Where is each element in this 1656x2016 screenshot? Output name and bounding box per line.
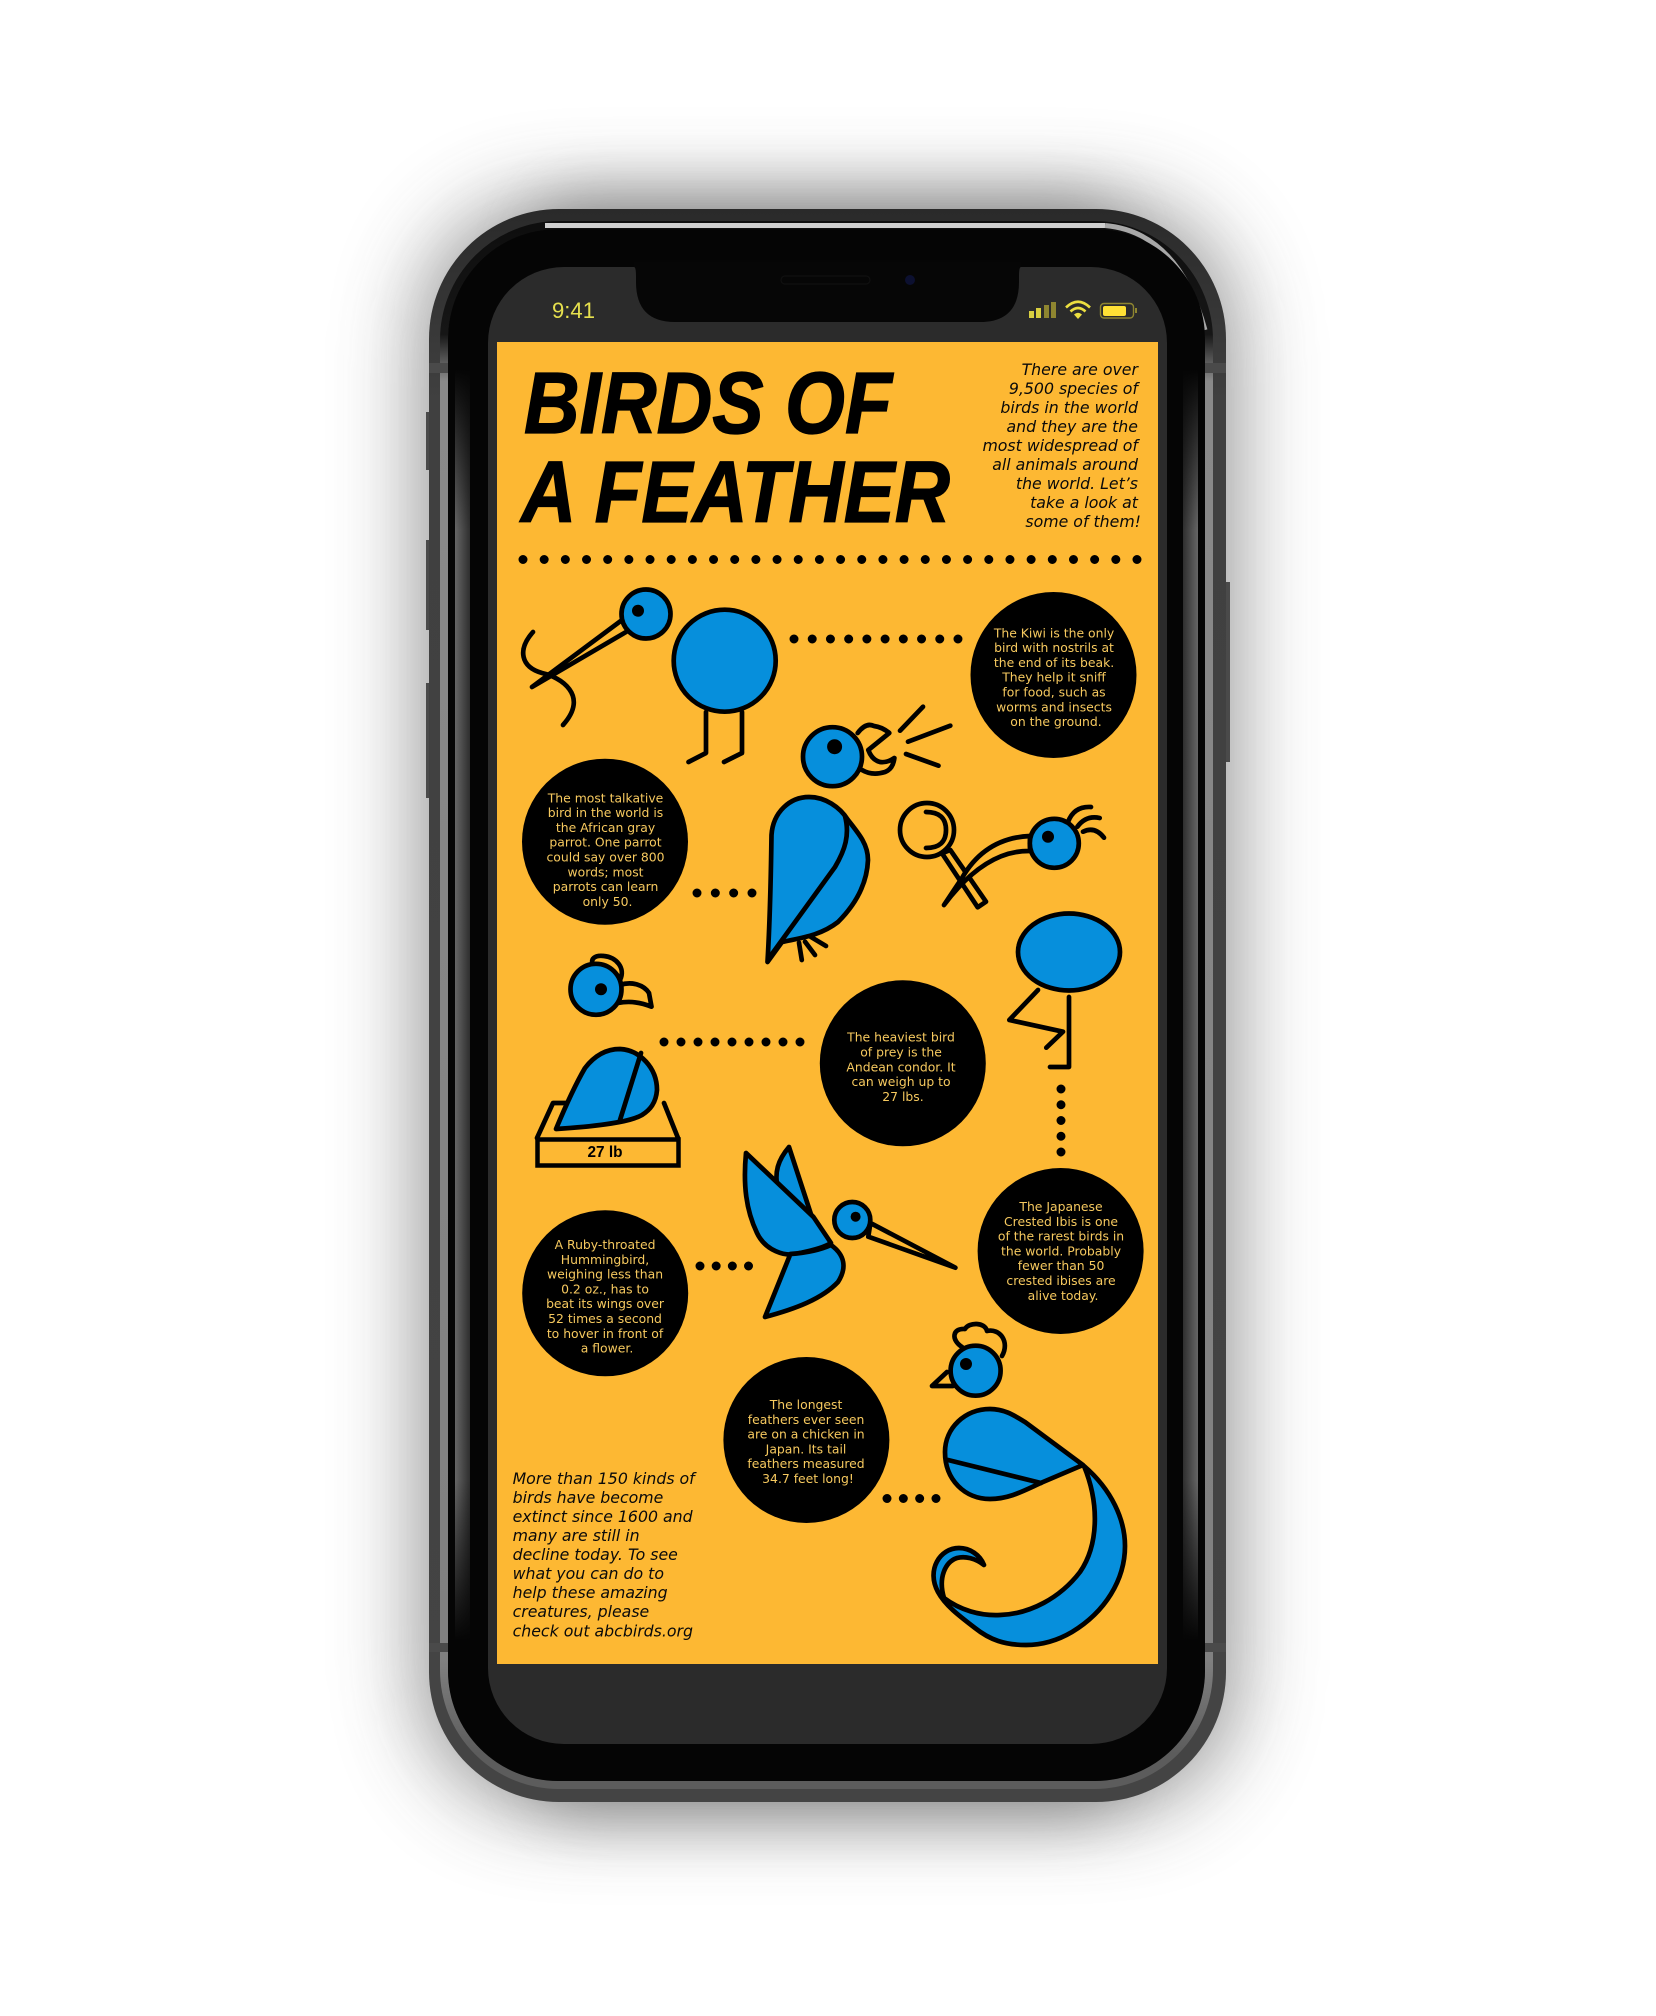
parrot wing xyxy=(769,816,847,958)
callout: kiwi: bird with nostrils at xyxy=(994,640,1114,655)
callout: ibis: alive today. xyxy=(1028,1288,1098,1303)
scale xyxy=(537,1103,678,1166)
kiwi feet squiggles xyxy=(523,632,574,725)
kiwi body xyxy=(674,610,776,712)
footer text: birds have become xyxy=(513,1488,663,1507)
title: BIRDS OF xyxy=(524,355,895,452)
callout: kiwi: on the ground. xyxy=(1010,714,1102,729)
scale label: 27 lb xyxy=(588,1144,623,1161)
dots: condor xyxy=(664,1038,801,1046)
callout: parrot: words; most xyxy=(568,864,644,879)
callout: parrot: bird in the world is xyxy=(548,805,663,820)
callout: ibis xyxy=(978,1168,1144,1334)
callout: condor: can weigh up to xyxy=(851,1074,951,1089)
callout: condor: The heaviest bird xyxy=(846,1030,955,1045)
callout: ibis: Crested Ibis is one xyxy=(1004,1214,1118,1229)
intro text: the world. Let’s xyxy=(1016,474,1138,493)
callout: chicken: feathers measured xyxy=(747,1456,865,1471)
callout: condor: of prey is the xyxy=(860,1044,942,1060)
chicken wing line xyxy=(948,1460,1041,1483)
bird: condor xyxy=(537,956,678,1166)
callout: kiwi: worms and insects xyxy=(996,699,1112,714)
footer text: many are still in xyxy=(513,1526,640,1545)
condor wing line xyxy=(620,1053,641,1120)
intro text: some of them! xyxy=(1025,512,1141,531)
phone shadow xyxy=(422,195,1233,1817)
status: battery xyxy=(1100,304,1137,318)
ibis crest xyxy=(1068,807,1104,838)
callout: hummingbird: A Ruby-throated xyxy=(555,1237,655,1252)
callout: parrot: the African gray xyxy=(556,820,655,835)
body xyxy=(1018,914,1120,990)
status: time: 9:41 xyxy=(552,298,595,323)
callout: parrot: only 50. xyxy=(583,894,632,909)
chicken body xyxy=(945,1409,1083,1499)
footer text: creatures, please xyxy=(513,1602,649,1621)
infographic poster xyxy=(497,342,1158,1664)
front wing xyxy=(745,1153,831,1254)
ibis head xyxy=(1030,819,1079,868)
callout: hummingbird: weighing less than xyxy=(547,1267,663,1282)
callout: parrot: The most talkative xyxy=(547,790,663,805)
black bezel xyxy=(448,229,1205,1781)
status: wifi xyxy=(1066,302,1090,319)
status: signal xyxy=(1029,302,1056,318)
footer text: what you can do to xyxy=(513,1564,664,1583)
kiwi head xyxy=(622,590,670,638)
callout: chicken: The longest xyxy=(769,1397,842,1412)
callout: ibis: the world. Probably xyxy=(1001,1243,1121,1258)
intro text: 9,500 species of xyxy=(1009,379,1140,398)
callout: ibis: of the rarest birds in xyxy=(998,1229,1124,1244)
parrot body xyxy=(768,797,868,962)
bird: parrot xyxy=(768,707,950,962)
kiwi legs xyxy=(688,712,742,762)
condor eye xyxy=(595,983,607,995)
callout: condor xyxy=(820,980,986,1146)
callout: kiwi: They help it sniff xyxy=(1001,670,1106,685)
callout: hummingbird: to hover in front of xyxy=(547,1326,664,1341)
callout: hummingbird: Hummingbird, xyxy=(561,1252,649,1267)
condor head xyxy=(570,964,622,1015)
chicken comb xyxy=(954,1324,1005,1356)
intro text: take a look at xyxy=(1030,493,1139,512)
intro text: There are over xyxy=(1022,360,1139,379)
intro text: most widespread of xyxy=(982,436,1140,455)
footer text: decline today. To see xyxy=(513,1545,678,1564)
callout: kiwi xyxy=(970,592,1136,758)
back wing xyxy=(776,1147,814,1222)
parrot head xyxy=(803,727,862,786)
bird: hummingbird xyxy=(745,1147,955,1317)
callout: chicken: feathers ever seen xyxy=(748,1412,864,1427)
speaker xyxy=(781,276,870,284)
legs xyxy=(1009,990,1069,1067)
callout: hummingbird: 0.2 oz., has to xyxy=(561,1281,649,1296)
bird: crested ibis xyxy=(900,803,1104,907)
callout: condor: Andean condor. It xyxy=(846,1059,956,1074)
callout: hummingbird xyxy=(522,1210,688,1376)
callout: parrot: parrots can learn xyxy=(553,879,658,894)
intro text: and they are the xyxy=(1006,417,1138,436)
callout: ibis: crested ibises are xyxy=(1006,1273,1116,1288)
parrot feet xyxy=(799,937,826,960)
parrot sound lines xyxy=(900,707,950,766)
condor crest xyxy=(592,956,622,980)
callout: parrot: parrot. One parrot xyxy=(549,835,662,850)
magnifier xyxy=(900,803,986,907)
screen xyxy=(488,267,1167,1744)
notch xyxy=(634,262,1021,322)
kiwi eye xyxy=(632,605,644,617)
footer text: More than 150 kinds of xyxy=(513,1469,697,1488)
condor body xyxy=(556,1049,657,1129)
dots: ibis xyxy=(1056,1089,1066,1153)
hummingbird eye xyxy=(851,1212,861,1222)
chicken eye xyxy=(960,1358,972,1370)
bezel side sheen xyxy=(455,370,1198,1640)
callout: chicken: Japan. Its tail xyxy=(765,1441,846,1456)
callout: ibis: fewer than 50 xyxy=(1018,1258,1104,1273)
condor beak xyxy=(618,983,652,1007)
phone frame xyxy=(429,209,1226,1802)
callout: hummingbird: 52 times a second xyxy=(548,1311,662,1326)
footer text: check out abcbirds.org xyxy=(513,1622,693,1640)
poster background xyxy=(497,342,1158,1664)
intro text: birds in the world xyxy=(1000,398,1139,417)
hummingbird head xyxy=(834,1202,870,1238)
dots: kiwi xyxy=(794,634,959,644)
phone mockup xyxy=(426,209,1230,1802)
ibis neck xyxy=(944,836,1030,905)
kiwi beak xyxy=(532,620,626,687)
chicken head xyxy=(951,1346,1001,1396)
callout: ibis: The Japanese xyxy=(1018,1199,1103,1214)
title xyxy=(519,355,950,541)
callout: hummingbird: a flower. xyxy=(581,1341,633,1356)
dots: parrot xyxy=(697,888,753,898)
top highlight xyxy=(545,223,1105,228)
bird: kiwi xyxy=(523,590,776,762)
dotted divider xyxy=(523,555,1138,564)
callout: chicken: 34.7 feet long! xyxy=(762,1471,854,1486)
parrot eye xyxy=(827,739,842,754)
callout: hummingbird: beat its wings over xyxy=(546,1296,665,1311)
parrot beak xyxy=(858,725,894,774)
dots: chicken xyxy=(887,1494,937,1503)
bird: oval body with legs xyxy=(1009,914,1120,1067)
chicken tail xyxy=(934,1466,1125,1645)
footer text: extinct since 1600 and xyxy=(513,1507,694,1526)
footer text: help these amazing xyxy=(513,1583,668,1602)
title: A FEATHER xyxy=(519,444,950,541)
callout: chicken xyxy=(723,1357,889,1523)
callout: kiwi: The Kiwi is the only xyxy=(993,625,1114,640)
callout: parrot xyxy=(522,759,688,925)
tail xyxy=(765,1245,843,1317)
callout: condor: 27 lbs. xyxy=(882,1089,924,1104)
side buttons xyxy=(426,412,1230,798)
hummingbird beak xyxy=(868,1223,955,1268)
callout: chicken: are on a chicken in xyxy=(747,1427,865,1442)
camera xyxy=(905,275,915,285)
callout: kiwi: for food, such as xyxy=(1002,684,1106,700)
dots: hummingbird xyxy=(700,1262,750,1270)
ibis eye xyxy=(1042,831,1054,843)
callout: parrot: could say over 800 xyxy=(546,850,665,864)
intro text: all animals around xyxy=(992,455,1139,474)
chicken beak xyxy=(932,1372,953,1386)
bird: chicken xyxy=(932,1324,1125,1645)
callout: kiwi: the end of its beak. xyxy=(994,655,1114,670)
